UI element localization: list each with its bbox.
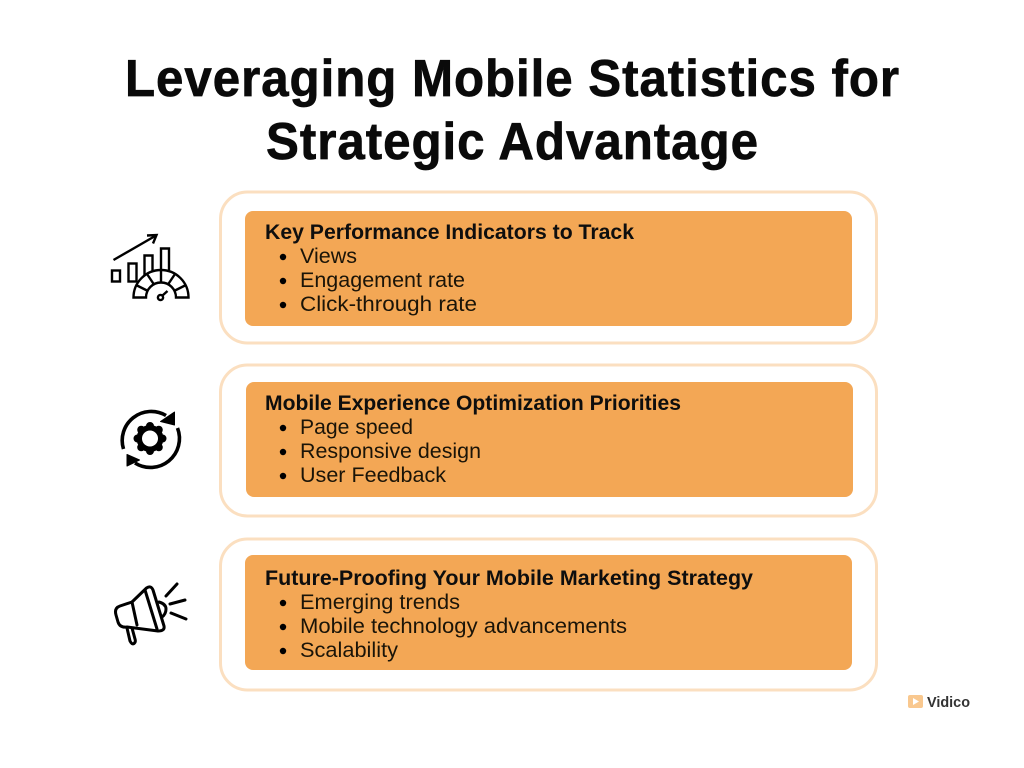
list: future-proofing items: Emerging trends	[300, 591, 460, 614]
list: KPI items	[280, 245, 477, 316]
logo: Vidico	[908, 695, 970, 711]
heading: future-proofing: Future-Proofing Your Mobile Marketing Strategy	[265, 567, 753, 590]
icon: chart and gauge	[112, 235, 188, 300]
list: optimization items: Page speed	[300, 416, 413, 439]
panel: mobile experience optimization	[220, 365, 876, 516]
list: future-proofing items	[280, 591, 627, 662]
list: future-proofing items: Mobile technology advancements	[300, 615, 627, 638]
list: future-proofing items: Scalability	[300, 639, 399, 662]
title: Strategic Advantage	[266, 113, 759, 171]
heading: optimization: Mobile Experience Optimization Priorities	[265, 392, 681, 415]
list: optimization items	[280, 416, 481, 487]
list: KPI items: Engagement rate	[300, 269, 465, 292]
icon: megaphone	[116, 584, 186, 644]
list: optimization items: Responsive design	[300, 440, 481, 463]
title	[125, 50, 900, 171]
list: KPI items: Views	[300, 245, 357, 268]
list: optimization items: User Feedback	[300, 464, 447, 487]
panel: key performance indicators	[220, 192, 876, 343]
logo: Vidico: Vidico	[927, 695, 970, 711]
title: Leveraging Mobile Statistics for	[125, 50, 900, 108]
panel: future-proofing	[220, 539, 876, 690]
list: KPI items: Click-through rate	[300, 293, 477, 316]
icon: rotating gear	[122, 411, 179, 467]
heading: KPI: Key Performance Indicators to Track	[265, 221, 634, 244]
